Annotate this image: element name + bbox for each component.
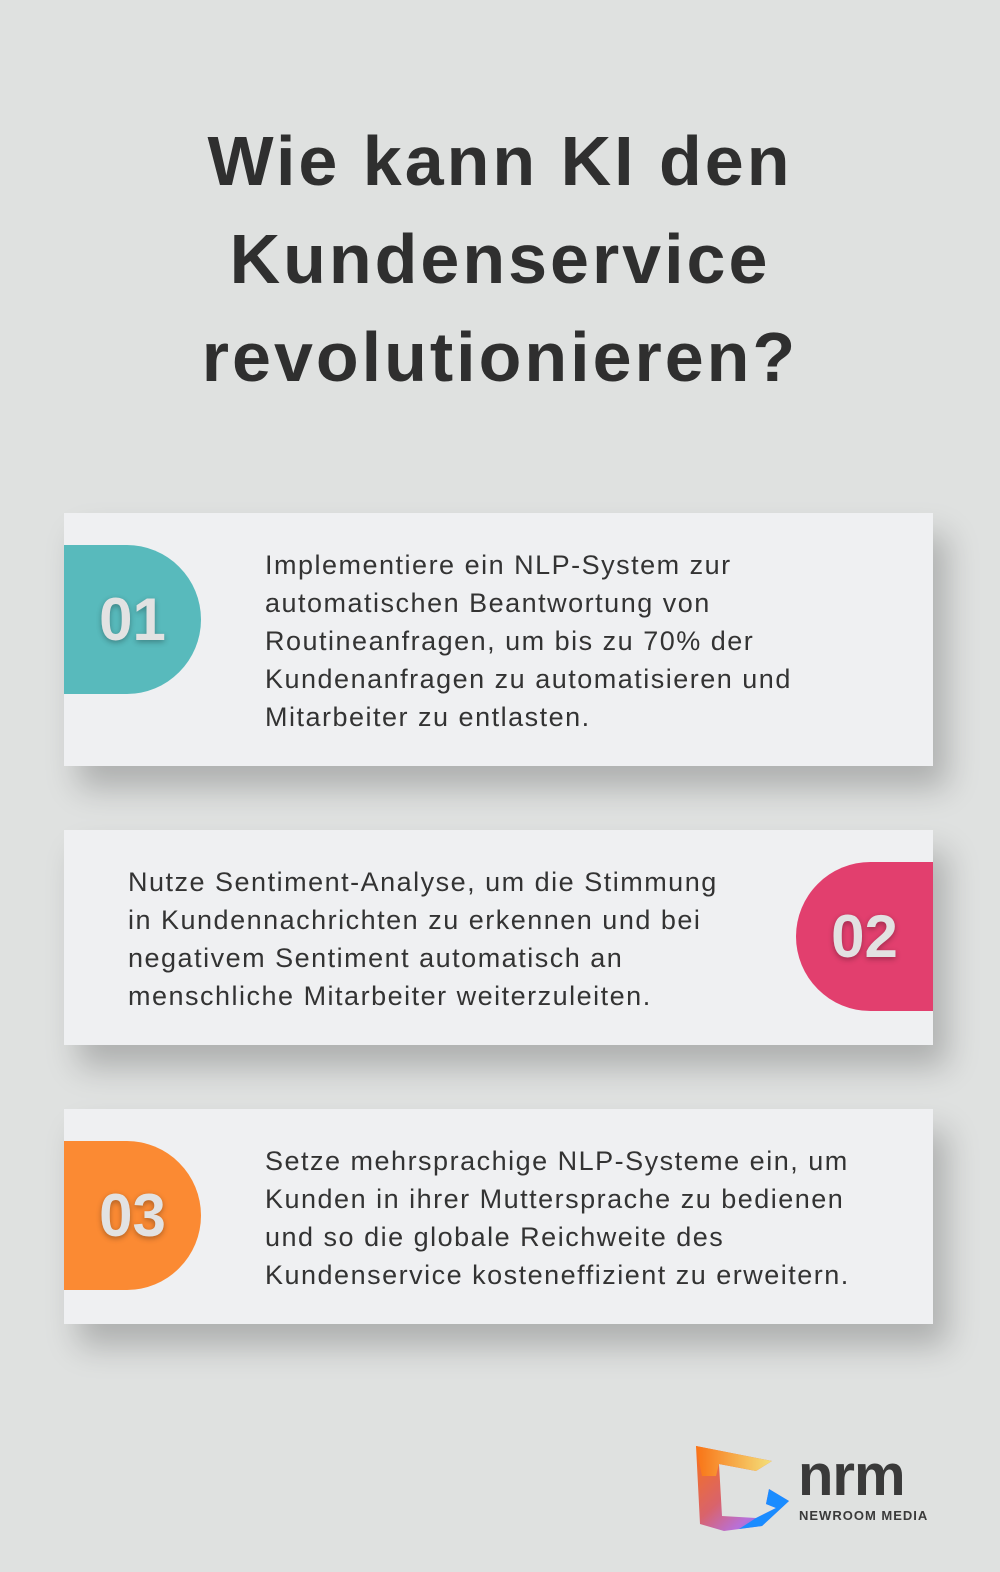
text 02: Nutze Sentiment-Analyse, um die Stimmung bbox=[128, 867, 718, 897]
badge 01: 01 bbox=[99, 586, 166, 653]
text 02: menschliche Mitarbeiter weiterzuleiten. bbox=[128, 981, 652, 1011]
text 02: negativem Sentiment automatisch an bbox=[128, 943, 623, 973]
title: revolutionieren? bbox=[202, 318, 798, 396]
title bbox=[202, 122, 798, 396]
logo: NEWROOM MEDIA bbox=[799, 1508, 928, 1523]
text 01 bbox=[265, 550, 792, 732]
text 03: Kunden in ihrer Muttersprache zu bedienen bbox=[265, 1184, 844, 1214]
title: Kundenservice bbox=[230, 220, 770, 298]
panel: step 01 bbox=[64, 513, 933, 766]
badge 03 bbox=[64, 1141, 201, 1290]
text 02 bbox=[128, 867, 718, 1011]
text 03: Setze mehrsprachige NLP-Systeme ein, um bbox=[265, 1146, 849, 1176]
badge 01 bbox=[64, 545, 201, 694]
logo text: nrm bbox=[798, 1443, 905, 1508]
text 01: Implementiere ein NLP-System zur bbox=[265, 550, 732, 580]
text 01: automatischen Beantwortung von bbox=[265, 588, 711, 618]
text 03: Kundenservice kosteneffizient zu erweitern. bbox=[265, 1260, 850, 1290]
badge 02 bbox=[796, 862, 933, 1011]
panel: step 02 bbox=[64, 830, 933, 1045]
text 01: Kundenanfragen zu automatisieren und bbox=[265, 664, 792, 694]
text 01: Mitarbeiter zu entlasten. bbox=[265, 702, 591, 732]
title: Wie kann KI den bbox=[207, 122, 792, 200]
text 03: und so die globale Reichweite des bbox=[265, 1222, 724, 1252]
text 03 bbox=[265, 1146, 850, 1290]
logo bbox=[696, 1443, 928, 1531]
text 02: in Kundennachrichten zu erkennen und bei bbox=[128, 905, 701, 935]
panel: step 03 bbox=[64, 1109, 933, 1324]
icon: logo mark bbox=[696, 1446, 789, 1531]
text 01: Routineanfragen, um bis zu 70% der bbox=[265, 626, 754, 656]
badge 02: 02 bbox=[831, 903, 898, 970]
badge 03: 03 bbox=[99, 1182, 166, 1249]
